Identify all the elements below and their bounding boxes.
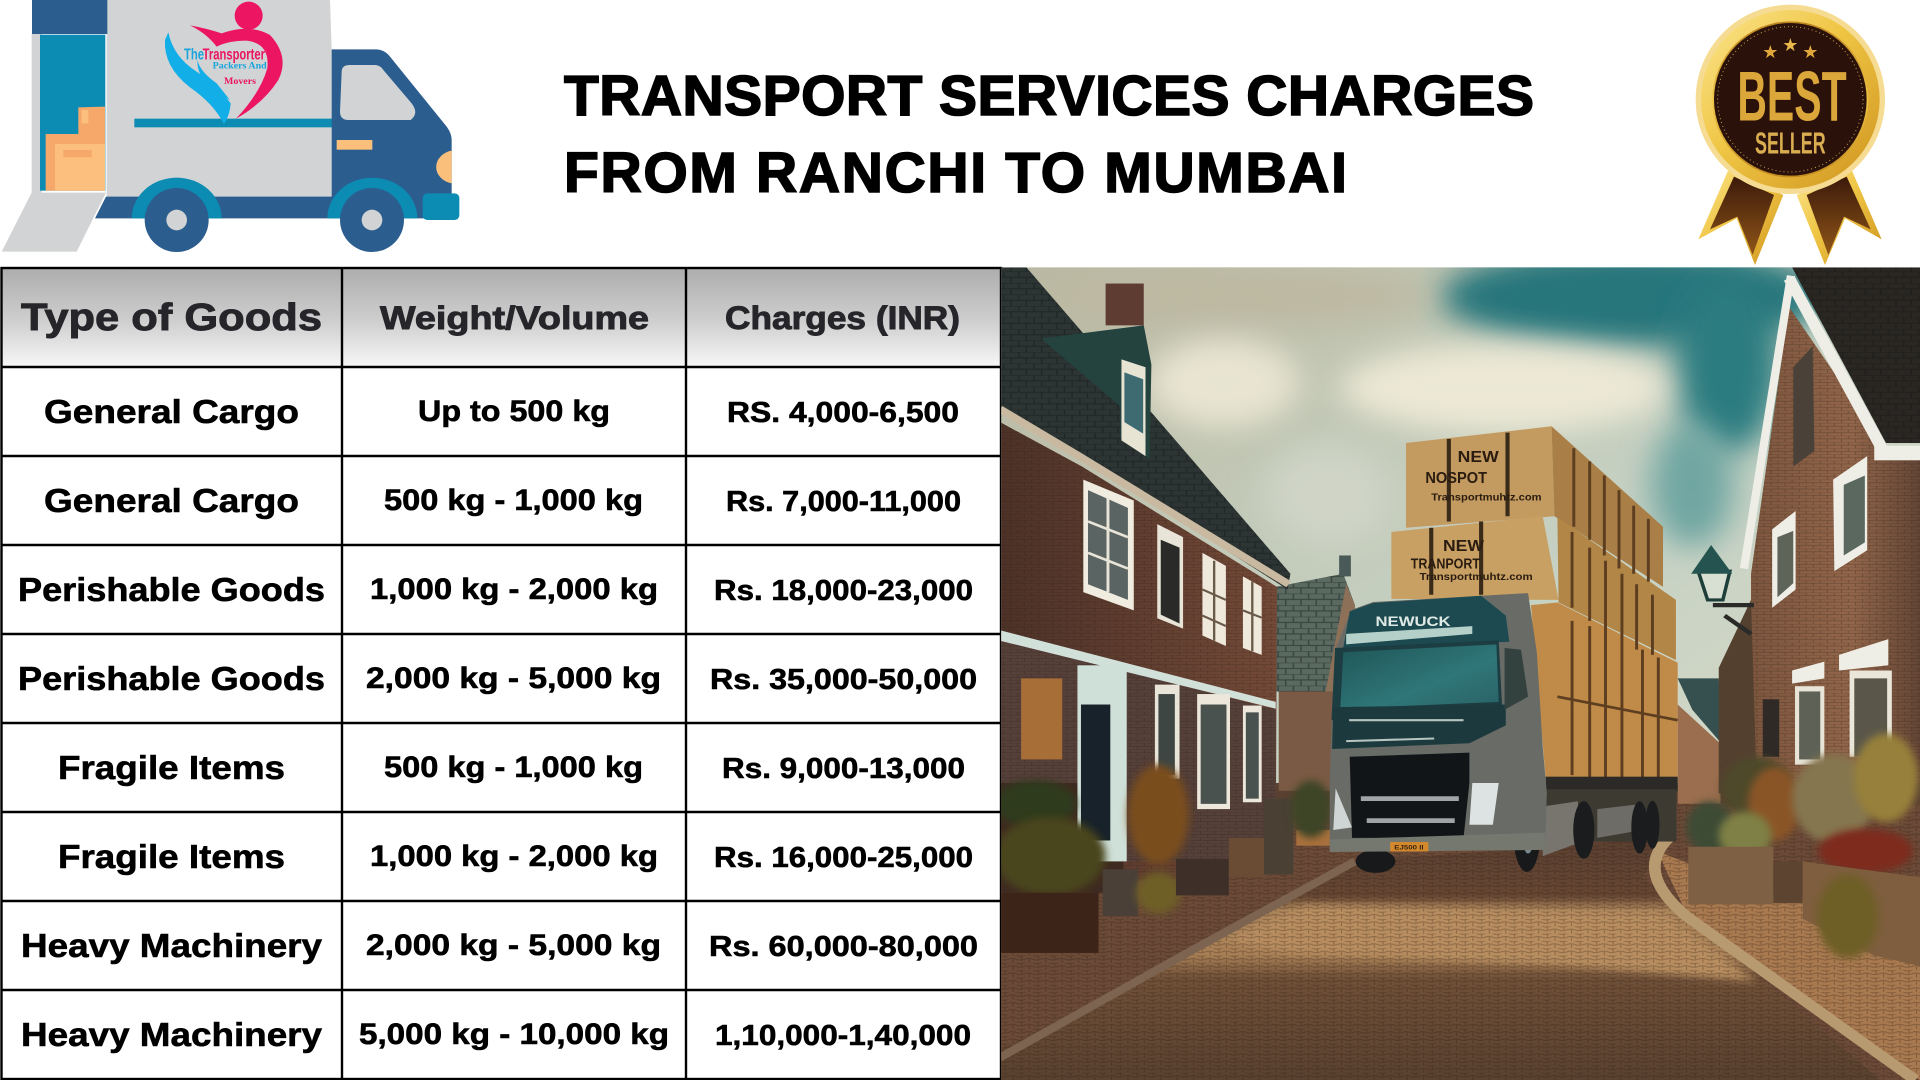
road and pavements (1000, 804, 1920, 1080)
row: fragile items 500 to 1000 kg: 500 kg - 1,000 kg (384, 751, 643, 784)
row: general cargo up to 500 kg: General Cargo (44, 393, 299, 430)
table header: Weight/Volume (380, 300, 649, 336)
cargo boxes (1391, 426, 1678, 782)
illustration: delivery truck with logo: Movers (224, 76, 257, 86)
illustration: delivery truck with logo: Packers And (213, 61, 268, 71)
row: perishable goods 2000 to 5000 kg (18, 660, 977, 697)
title: FROM RANCHI TO MUMBAI (564, 141, 1347, 205)
lower windows (1839, 639, 1888, 671)
row: heavy machinery 5000 to 10000 kg (21, 1016, 971, 1053)
illustration: delivery truck with logo: The (184, 46, 204, 63)
truck cab (1330, 593, 1547, 852)
right brick building (1686, 267, 1920, 966)
cargo boxes: NOSPOT (1425, 469, 1487, 487)
title: TRANSPORT SERVICES CHARGES (564, 64, 1534, 128)
icon: best seller badge: ★ (1802, 42, 1818, 63)
upper windows (1083, 480, 1134, 610)
row: heavy machinery 5000 to 10000 kg: 1,10,000-1,40,000 (715, 1020, 971, 1052)
dormer (1041, 325, 1151, 459)
row: heavy machinery 2000 to 5000 kg: Heavy Machinery (21, 927, 323, 964)
row: general cargo 500 to 1000 kg (44, 482, 961, 519)
cargo boxes: Transportmuhtz.com (1420, 572, 1533, 583)
illustration: delivery truck with logo (2, 0, 460, 252)
cargo boxes: Transportmuhtz.com (1431, 492, 1542, 503)
table header: Type of Goods (21, 297, 322, 339)
row: perishable goods 2000 to 5000 kg: Rs. 35,000-50,000 (710, 664, 977, 696)
cargo boxes: NEW (1443, 537, 1484, 555)
row: fragile items 500 to 1000 kg: Rs. 9,000-13,000 (722, 753, 965, 785)
icon: best seller badge (1696, 4, 1885, 265)
row: general cargo 500 to 1000 kg: 500 kg - 1,000 kg (384, 484, 643, 517)
row: heavy machinery 2000 to 5000 kg: 2,000 kg - 5,000 kg (366, 929, 661, 962)
cargo boxes: NEW (1458, 448, 1499, 466)
row: fragile items 500 to 1000 kg: Fragile Items (58, 749, 285, 786)
truck trailer chassis and wheels (1356, 777, 1678, 873)
icon: best seller badge: ★ (1782, 35, 1798, 56)
title (564, 64, 1534, 205)
row: general cargo 500 to 1000 kg: Rs. 7,000-11,000 (726, 486, 961, 518)
truck cab: EJ500 II (1394, 843, 1424, 851)
row: fragile items 1000 to 2000 kg: Rs. 16,000-25,000 (714, 842, 973, 874)
chimney (1106, 284, 1144, 325)
row: perishable goods 1000 to 2000 kg (18, 571, 973, 608)
row: heavy machinery 5000 to 10000 kg: 5,000 kg - 10,000 kg (359, 1018, 669, 1051)
icon: best seller badge: ★ (1762, 42, 1778, 63)
wall planters (994, 780, 1076, 827)
right planters (1722, 757, 1792, 820)
row: fragile items 1000 to 2000 kg (58, 838, 973, 875)
illustration: delivery truck with logo: Transporter (203, 46, 265, 63)
row: heavy machinery 2000 to 5000 kg (21, 927, 978, 964)
row: fragile items 500 to 1000 kg (58, 749, 965, 786)
photo: truck loaded with boxes on a village street (1001, 267, 1920, 1080)
row: general cargo up to 500 kg: RS. 4,000-6,500 (727, 397, 959, 429)
row: general cargo up to 500 kg (44, 393, 959, 430)
shutter window (1793, 346, 1814, 467)
notice board (1021, 678, 1062, 759)
row: perishable goods 1000 to 2000 kg: 1,000 kg - 2,000 kg (370, 573, 658, 606)
row: perishable goods 1000 to 2000 kg: Rs. 18,000-23,000 (714, 575, 973, 607)
lamp (1691, 545, 1754, 634)
row: perishable goods 2000 to 5000 kg: 2,000 kg - 5,000 kg (366, 662, 661, 695)
table header: Charges (INR) (725, 300, 960, 336)
upper windows (1833, 456, 1867, 571)
row: perishable goods 2000 to 5000 kg: Perishable Goods (18, 660, 325, 697)
row: heavy machinery 2000 to 5000 kg: Rs. 60,000-80,000 (709, 931, 978, 963)
row: fragile items 1000 to 2000 kg: Fragile Items (58, 838, 285, 875)
icon: best seller badge: SELLER (1755, 126, 1826, 160)
cargo boxes: TRANPORT (1411, 556, 1480, 572)
table header (2, 268, 1001, 366)
left brick building (994, 267, 1332, 953)
row: heavy machinery 5000 to 10000 kg: Heavy Machinery (21, 1016, 323, 1053)
sky (1000, 247, 1920, 1080)
row: fragile items 1000 to 2000 kg: 1,000 kg - 2,000 kg (370, 840, 658, 873)
lower windows and door (1077, 665, 1127, 861)
distant houses (1276, 555, 1722, 804)
row: general cargo up to 500 kg: Up to 500 kg (418, 395, 610, 428)
table grid (1, 268, 1001, 1079)
row: general cargo 500 to 1000 kg: General Cargo (44, 482, 299, 519)
row: perishable goods 1000 to 2000 kg: Perishable Goods (18, 571, 325, 608)
truck cab: NEWUCK (1376, 615, 1451, 630)
panel: charges table (1, 268, 1001, 1079)
